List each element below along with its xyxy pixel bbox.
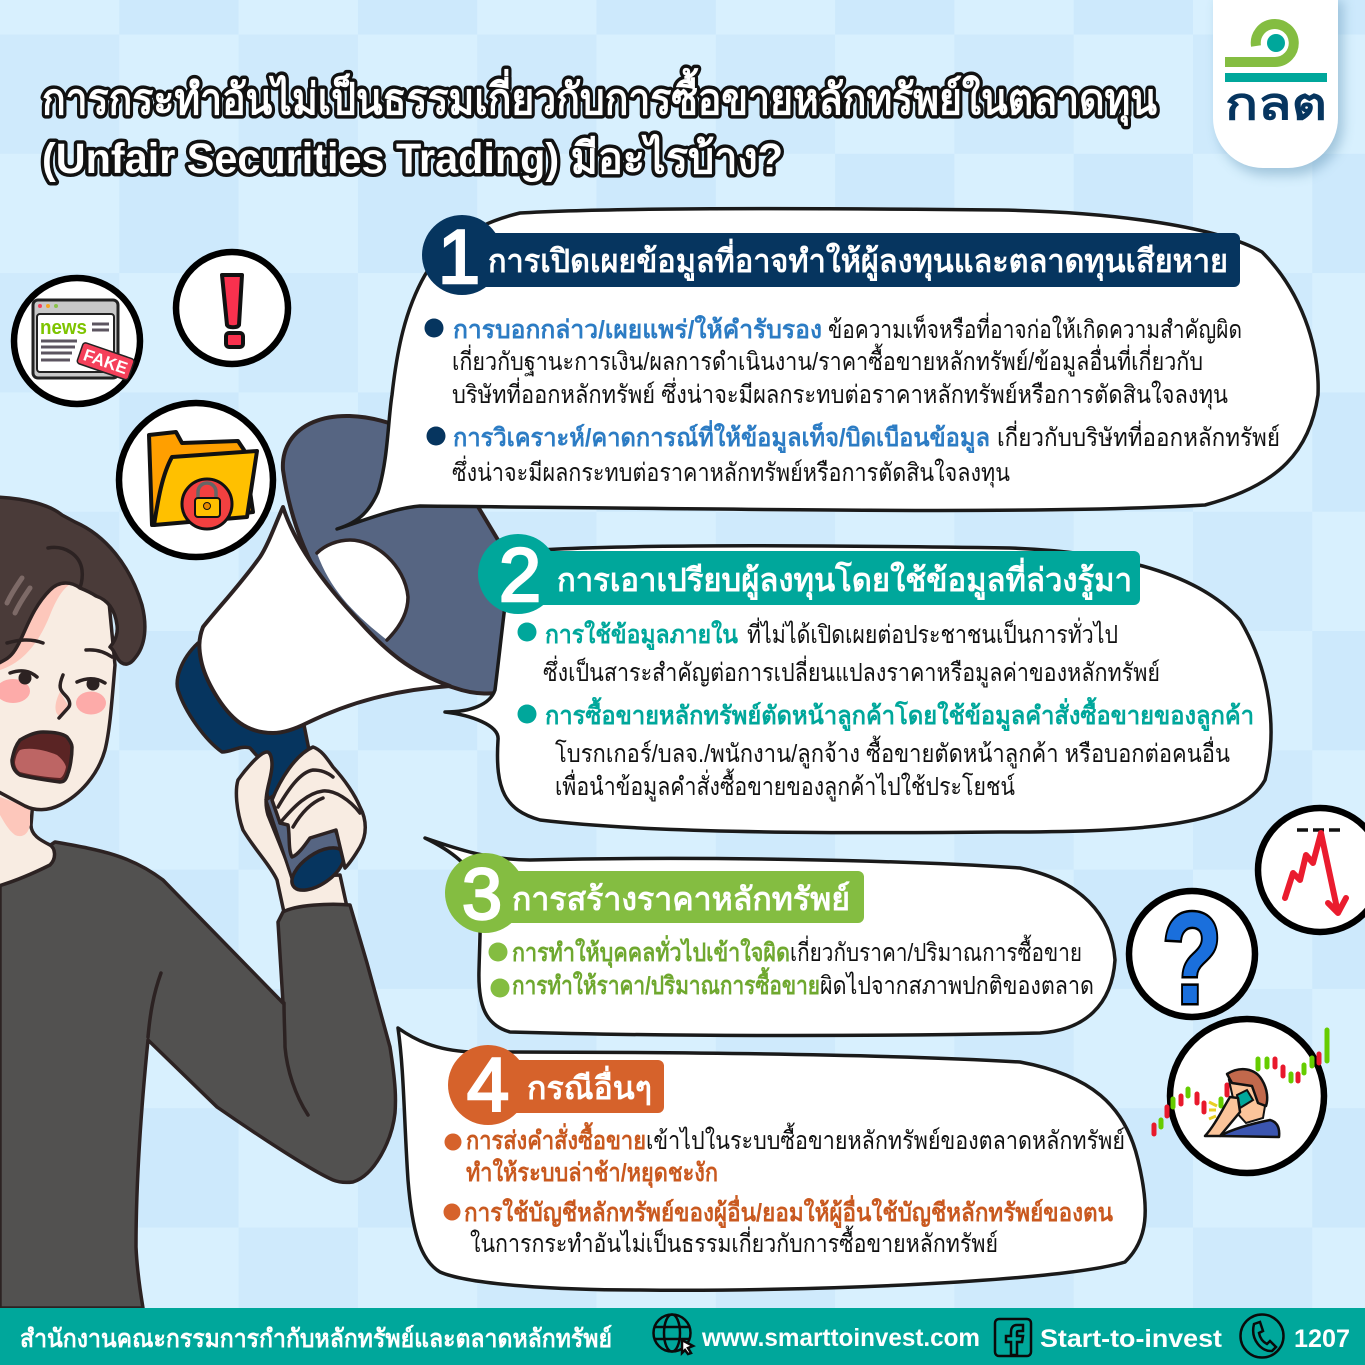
title: (Unfair Securities Trading) มีอะไรบ้าง? (42, 133, 783, 183)
panel 4 text: ในการกระทำอันไม่เป็นธรรมเกี่ยวกับการซื้อขายหลักทรัพย์ (470, 1225, 998, 1258)
neck (0, 780, 55, 887)
body (1220, 1120, 1279, 1137)
cheek right (76, 692, 106, 714)
title (42, 67, 1158, 183)
panel 4 text: ทำให้ระบบล่าช้า/หยุดชะงัก (466, 1157, 718, 1189)
icon: trader on the phone (1154, 1019, 1327, 1173)
panel 2 text: การใช้ข้อมูลภายใน (545, 619, 738, 651)
megaphone bell opening (317, 540, 408, 640)
hair shine (7, 578, 30, 613)
panel 2 text: เพื่อนำข้อมูลคำสั่งซื้อขายของลูกค้าไปใช้ประโยชน์ (555, 768, 1015, 802)
footer bar: www.smarttoinvest.com (701, 1324, 980, 1352)
sweater folds (148, 973, 308, 1115)
footer bar: Start-to-invest (1040, 1325, 1223, 1353)
heading 2: การเอาเปรียบผู้ลงทุนโดยใช้ข้อมูลที่ล่วงรู้มา (557, 557, 1132, 601)
panel 2 text: การซื้อขายหลักทรัพย์ตัดหน้าลูกค้าโดยใช้ข้อมูลคำสั่งซื้อขายของลูกค้า (545, 696, 1254, 732)
panel 3 text: การทำให้บุคคลทั่วไปเข้าใจผิด (512, 935, 790, 969)
panel 1 text: เกี่ยวกับบริษัทที่ออกหลักทรัพย์ (997, 420, 1280, 452)
heading 4: กรณีอื่นๆ (527, 1065, 652, 1106)
footer bar: สำนักงานคณะกรรมการกำกับหลักทรัพย์และตลาดหลักทรัพย์ (20, 1324, 612, 1353)
icon: facebook (995, 1319, 1031, 1356)
icon: locked folder (119, 403, 273, 557)
panel 3 text: เกี่ยวกับราคา/ปริมาณการซื้อขาย (790, 934, 1082, 967)
panel 3 bubble (425, 838, 1115, 1036)
icon: falling chart (1258, 808, 1365, 932)
shout lines (1209, 1102, 1217, 1119)
cheeks (0, 679, 30, 703)
panel 2 text: โบรกเกอร์/บลจ./พนักงาน/ลูกจ้าง ซื้อขายตัดหน้าลูกค้า หรือบอกต่อคนอื่น (555, 735, 1230, 769)
logo: SEC Thailand (1213, 0, 1343, 175)
bell opening edge (317, 540, 408, 640)
icon: fake news: FAKE (81, 345, 130, 378)
panel 4 text: การใช้บัญชีหลักทรัพย์ของผู้อื่น/ยอมให้ผู้อื่นใช้บัญชีหลักทรัพย์ของตน (464, 1195, 1113, 1229)
panel 3 text: ผิดไปจากสภาพปกติของตลาด (820, 971, 1094, 1000)
megaphone back and handle (177, 643, 310, 815)
megaphone grip (266, 780, 345, 882)
panel 2 text: ซึ่งเป็นสาระสำคัญต่อการเปลี่ยนแปลงราคาหรือมูลค่าของหลักทรัพย์ (543, 655, 1160, 688)
panel 2 text (518, 617, 1254, 802)
megaphone bell (283, 416, 510, 694)
icon: question mark: ? (1162, 885, 1222, 1031)
candlesticks (1154, 1030, 1327, 1134)
panel 1 text (424, 312, 1280, 488)
heading 3: การสร้างราคาหลักทรัพย์ (512, 881, 850, 917)
icon: question mark (1129, 885, 1255, 1031)
heading 2: 2 (499, 533, 541, 618)
heading 4 (448, 1043, 664, 1128)
grip end cap (285, 840, 351, 898)
icon: fake news: news (40, 317, 87, 339)
megaphone cone (199, 507, 450, 733)
heading 1 (422, 215, 1240, 300)
panel 4 text: การส่งคำสั่งซื้อขาย (466, 1121, 646, 1155)
icon: exclamation mark (176, 252, 288, 364)
icon: fake news (14, 278, 140, 404)
panel 1 bubble (337, 209, 1318, 529)
hair (0, 497, 145, 665)
heading 2 (478, 533, 1140, 618)
logo: SEC Thailand: กลต (1225, 80, 1327, 129)
panel 3 text (488, 934, 1094, 1000)
face and neck (1229, 1080, 1265, 1123)
footer bar: 1207 (1294, 1325, 1350, 1353)
phone (1237, 1090, 1253, 1108)
heading 3 (445, 853, 864, 935)
hand palm and thumb (236, 752, 347, 917)
face (0, 560, 115, 810)
neck shadow (0, 797, 30, 836)
panel 2 text: ที่ไม่ได้เปิดเผยต่อประชาชนเป็นการทั่วไป (747, 617, 1118, 649)
heading 3: 3 (462, 855, 502, 935)
panel 3 text: การทำให้ราคา/ปริมาณการซื้อขาย (512, 966, 820, 1000)
sweater (0, 842, 395, 1308)
heading 1: 1 (438, 215, 480, 300)
arm (1205, 1097, 1240, 1136)
icon: phone (1240, 1314, 1284, 1358)
nose shade (55, 692, 68, 716)
fingers (272, 747, 365, 868)
panel 4 text (444, 1121, 1125, 1258)
footer bar (0, 1308, 1365, 1365)
panel 1 text: เกี่ยวกับฐานะการเงิน/ผลการดำเนินงาน/ราคาซื้อขายหลักทรัพย์/ข้อมูลอื่นที่เกี่ยวกับ (452, 343, 1203, 377)
panel 1 text: บริษัทที่ออกหลักทรัพย์ ซึ่งน่าจะมีผลกระทบต่อราคาหลักทรัพย์หรือการตัดสินใจลงทุน (452, 377, 1228, 410)
panel 2 bubble (445, 533, 1271, 833)
panel 1 text: ซึ่งน่าจะมีผลกระทบต่อราคาหลักทรัพย์หรือการตัดสินใจลงทุน (452, 455, 1010, 488)
right eye (86, 678, 100, 690)
title: การกระทำอันไม่เป็นธรรมเกี่ยวกับการซื้อขายหลักทรัพย์ในตลาดทุน (42, 67, 1158, 127)
heading 4: 4 (467, 1043, 509, 1128)
panel 4 text: เข้าไปในระบบซื้อขายหลักทรัพย์ของตลาดหลักทรัพย์ (646, 1122, 1125, 1155)
panel 1 text: การวิเคราะห์/คาดการณ์ที่ให้ข้อมูลเท็จ/บิดเบือนข้อมูล (453, 420, 990, 454)
left eye (18, 672, 32, 684)
panel 1 text: การบอกกล่าว/เผยแพร่/ให้คำรับรอง (453, 314, 822, 344)
panel 4 bubble (398, 1028, 1145, 1290)
eyes and brows (7, 640, 112, 718)
hair (1227, 1069, 1267, 1106)
icon: globe (654, 1314, 693, 1354)
character: person shouting into megaphone (0, 416, 510, 1308)
forehead shadow (0, 584, 72, 670)
panel 1 text: ข้อความเท็จหรือที่อาจก่อให้เกิดความสำคัญผิด (828, 312, 1242, 344)
tongue (15, 749, 66, 778)
mouth (12, 732, 72, 782)
hair details (48, 547, 82, 588)
finger lines (278, 770, 360, 827)
heading 1: การเปิดเผยข้อมูลที่อาจทำให้ผู้ลงทุนและตลาดทุนเสียหาย (488, 238, 1228, 282)
